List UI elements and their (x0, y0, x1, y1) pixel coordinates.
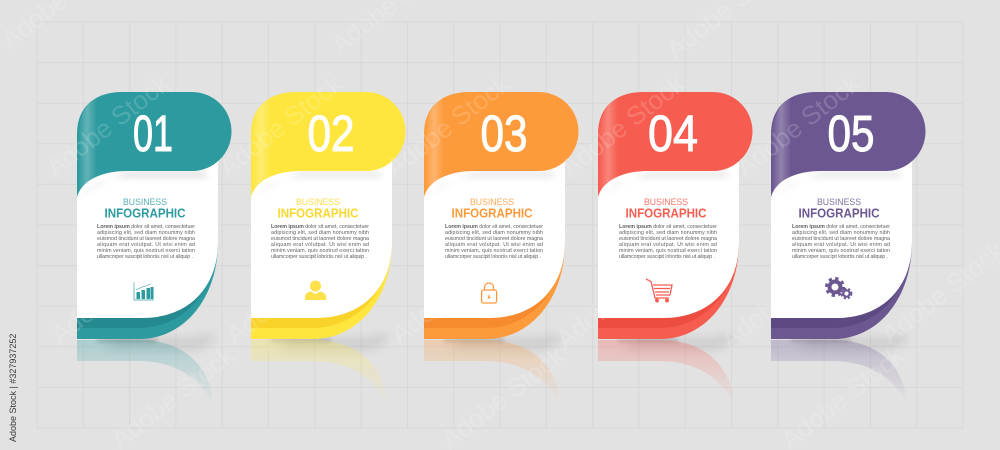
card 04 (598, 92, 752, 404)
watermark: Adobe Stock (555, 68, 691, 183)
body text: aliquam erat volutpat. Ut wisi enim ad (619, 242, 717, 248)
body text: euismod tincidunt ut laoreet dolore magna (271, 236, 369, 242)
body text: euismod tincidunt ut laoreet dolore magna (792, 236, 890, 242)
watermark: Adobe Stock (220, 235, 356, 350)
body text: ullamcorper suscipit lobortis nisl ut aliquip . (445, 254, 541, 260)
body text: aliquam erat volutpat. Ut wisi enim ad (792, 242, 890, 248)
heading: BUSINESS (123, 197, 167, 208)
icon: padlock (482, 283, 497, 303)
heading (798, 197, 880, 220)
heading (626, 197, 706, 220)
body text: aliquam erat volutpat. Ut wisi enim ad (271, 242, 369, 248)
heading: INFOGRAPHIC (798, 206, 880, 220)
body text: minim veniam, quis nostrud exerci tation (97, 248, 195, 254)
number tab (771, 92, 926, 197)
card 02 (251, 92, 406, 404)
card 05 (771, 92, 926, 404)
icon: bar chart (134, 282, 154, 300)
heading (278, 197, 358, 220)
watermark: Adobe Stock (550, 240, 686, 355)
body text: minim veniam, quis nostrud exerci tation (445, 248, 543, 254)
body text: Lorem ipsum dolor sit amet, consectetuer (792, 224, 890, 230)
body text (792, 224, 890, 260)
number tab (77, 92, 232, 197)
watermark: Adobe Stock (380, 68, 516, 183)
body text (271, 224, 369, 260)
card 01 (77, 92, 232, 404)
body text: adipiscing elit, sed diam nonummy nibh (271, 230, 369, 236)
number tab (598, 92, 752, 197)
body text: euismod tincidunt ut laoreet dolore magna (619, 236, 717, 242)
watermark: Adobe Stock (730, 68, 866, 183)
watermark: Adobe Stock (385, 235, 521, 350)
body text: Lorem ipsum dolor sit amet, consectetuer (619, 224, 717, 230)
number: 01 (133, 105, 173, 162)
body text: Lorem ipsum dolor sit amet, consectetuer (271, 224, 369, 230)
body text: minim veniam, quis nostrud exerci tation (271, 248, 369, 254)
body text: aliquam erat volutpat. Ut wisi enim ad (97, 242, 195, 248)
heading: INFOGRAPHIC (452, 206, 532, 220)
body text: ullamcorper suscipit lobortis nisl ut aliquip . (97, 254, 193, 260)
watermark: Adobe Stock (715, 240, 851, 355)
heading: BUSINESS (644, 197, 688, 208)
body text (97, 224, 195, 260)
body text: adipiscing elit, sed diam nonummy nibh (445, 230, 543, 236)
body text: adipiscing elit, sed diam nonummy nibh (619, 230, 717, 236)
body text: aliquam erat volutpat. Ut wisi enim ad (445, 242, 543, 248)
tab highlight (426, 97, 444, 192)
number: 03 (480, 105, 528, 162)
body text: minim veniam, quis nostrud exerci tation (619, 248, 717, 254)
tab highlight (600, 97, 618, 192)
watermark: Adobe Stock (40, 68, 176, 183)
body text: minim veniam, quis nostrud exerci tation (792, 248, 890, 254)
body text: ullamcorper suscipit lobortis nisl ut aliquip . (792, 254, 888, 260)
stock id label: Adobe Stock | #327937252 (8, 334, 18, 442)
number tab (424, 92, 578, 197)
number: 04 (648, 105, 698, 162)
heading: BUSINESS (470, 197, 514, 208)
body text: adipiscing elit, sed diam nonummy nibh (792, 230, 890, 236)
heading: INFOGRAPHIC (278, 206, 358, 220)
watermark: Adobe Stock (45, 235, 181, 350)
body text: euismod tincidunt ut laoreet dolore magna (97, 236, 195, 242)
heading: BUSINESS (296, 197, 340, 208)
body text (619, 224, 717, 260)
body text (445, 224, 543, 260)
heading: INFOGRAPHIC (104, 206, 186, 220)
watermark: Adobe Stock (213, 68, 349, 183)
body text: ullamcorper suscipit lobortis nisl ut aliquip . (271, 254, 367, 260)
body text: Lorem ipsum dolor sit amet, consectetuer (445, 224, 543, 230)
icon: gears (826, 278, 852, 298)
body text: Lorem ipsum dolor sit amet, consectetuer (97, 224, 195, 230)
icon: person (305, 280, 326, 300)
heading: BUSINESS (817, 197, 861, 208)
heading (452, 197, 532, 220)
number tab (251, 92, 406, 197)
tab highlight (79, 97, 97, 192)
number: 05 (828, 105, 874, 162)
body text: adipiscing elit, sed diam nonummy nibh (97, 230, 195, 236)
body text: euismod tincidunt ut laoreet dolore magna (445, 236, 543, 242)
icon: shopping cart (646, 279, 672, 302)
tab highlight (253, 97, 271, 192)
heading (104, 197, 186, 220)
tab highlight (773, 97, 791, 192)
body text: ullamcorper suscipit lobortis nisl ut aliquip . (619, 254, 715, 260)
heading: INFOGRAPHIC (626, 206, 706, 220)
card 03 (424, 92, 578, 404)
number: 02 (308, 105, 354, 162)
